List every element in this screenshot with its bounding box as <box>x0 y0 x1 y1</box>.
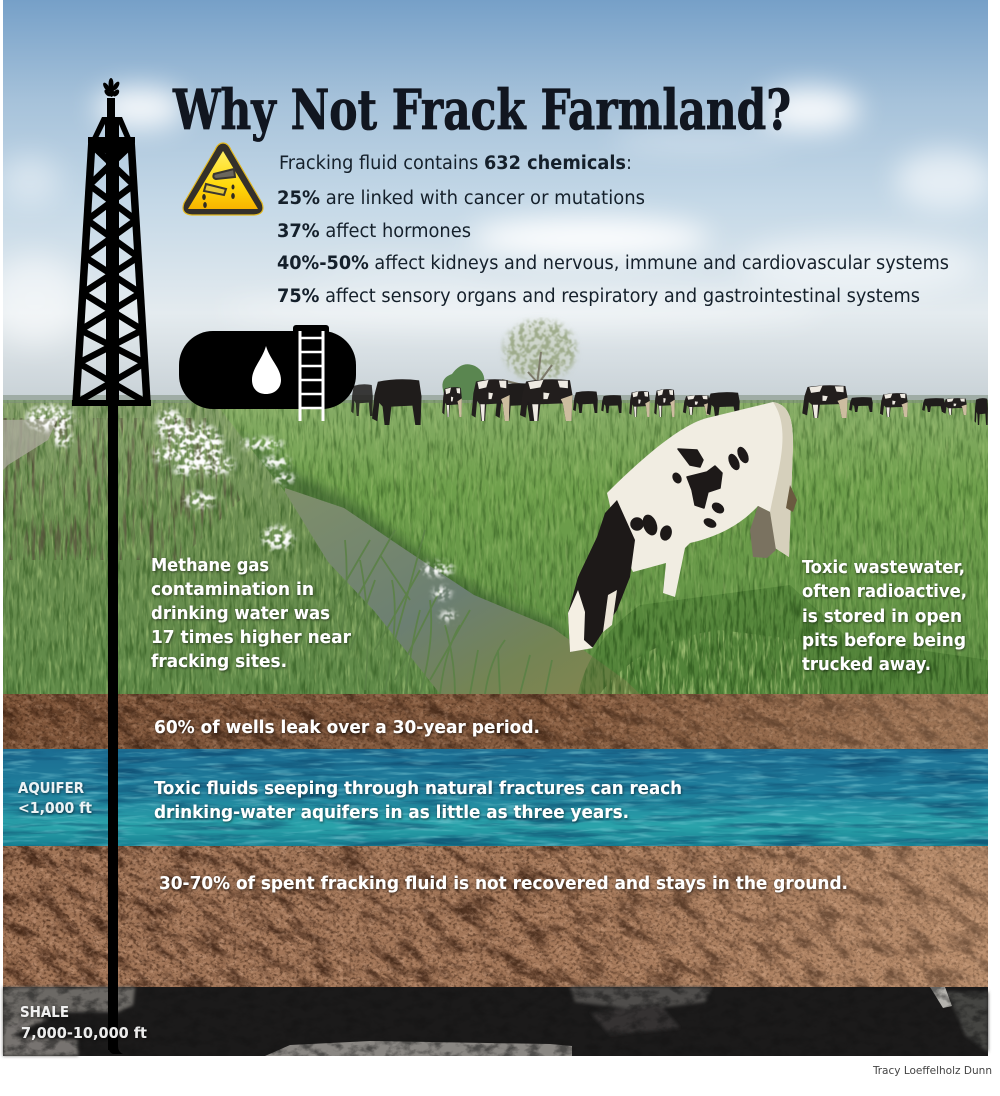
icon: water drop <box>252 346 281 394</box>
soil layers: upper and lower <box>3 694 988 987</box>
text block: methane contamination: contamination in <box>151 579 314 600</box>
text block: fracking fluid chemicals: 40%-50% affect kidneys and nervous, immune and cardiovascular systems <box>277 253 949 274</box>
bank shadow above stream <box>235 430 570 650</box>
left grassy bank <box>3 402 440 694</box>
text block: fracking fluid chemicals: Fracking fluid contains 632 chemicals : <box>279 153 632 174</box>
icon: storage tank with water drop and ladder <box>179 325 356 421</box>
illustration: grazing cow drinking at stream <box>568 402 797 652</box>
rock layer: shale <box>3 987 988 1056</box>
text block: wells leak: 60% of wells leak over a 30-year period. <box>154 717 540 738</box>
text block: toxic wastewater: often radioactive, <box>802 581 967 602</box>
label: shale depth: 7,000-10,000 ft <box>21 1024 148 1042</box>
illustration: white roadside flowers <box>26 405 456 621</box>
text block: fracking fluid chemicals <box>277 153 949 307</box>
text block: toxic fluids seeping: drinking-water aquifers in as little as three years. <box>154 802 629 823</box>
label: shale depth <box>20 1003 148 1042</box>
near-bank grass <box>578 585 988 694</box>
text block: methane contamination: drinking water was <box>151 603 330 624</box>
icon: oil derrick with drill pipe <box>72 78 151 1054</box>
illustration: distant trees <box>3 320 988 403</box>
water layer: aquifer <box>3 749 988 846</box>
stream <box>285 488 640 694</box>
panel: sky <box>0 0 995 402</box>
text block: toxic fluids seeping <box>154 778 682 823</box>
title: Why Not Frack Farmland? <box>172 77 791 142</box>
icon: chemical hazard warning triangle <box>183 143 263 215</box>
text block: methane contamination: fracking sites. <box>151 651 287 672</box>
text block: methane contamination <box>151 555 351 672</box>
text block: toxic wastewater: pits before being <box>802 630 966 651</box>
panel: farm field <box>3 400 988 694</box>
label: shale depth: SHALE <box>20 1003 69 1021</box>
text block: spent fracking fluid: 30-70% of spent fracking fluid is not recovered and stays in the ground. <box>159 873 848 894</box>
credit: Tracy Loeffelholz Dunn <box>872 1064 992 1077</box>
illustration: distant herd of cows <box>351 379 988 425</box>
text block: fracking fluid chemicals: 37% affect hormones <box>277 221 471 242</box>
icon: ladder <box>300 331 323 421</box>
text block: methane contamination: 17 times higher near <box>151 627 351 648</box>
text block: fracking fluid chemicals: 25% are linked with cancer or mutations <box>277 188 645 209</box>
text block: methane contamination: Methane gas <box>151 555 269 576</box>
text block: toxic fluids seeping: Toxic fluids seeping through natural fractures can reach <box>154 778 682 799</box>
text block: toxic wastewater: Toxic wastewater, <box>802 557 965 578</box>
text block: toxic wastewater: is stored in open <box>802 606 962 627</box>
text block: fracking fluid chemicals: 75% affect sensory organs and respiratory and gastrointestinal systems <box>277 286 920 307</box>
label: aquifer depth: AQUIFER <box>18 779 85 797</box>
icon: oil gusher <box>102 78 121 98</box>
label: aquifer depth <box>18 779 93 817</box>
blades over stream <box>335 530 552 694</box>
text block: toxic wastewater <box>802 557 967 675</box>
text block: toxic wastewater: trucked away. <box>802 654 931 675</box>
label: aquifer depth: <1,000 ft <box>18 799 93 817</box>
